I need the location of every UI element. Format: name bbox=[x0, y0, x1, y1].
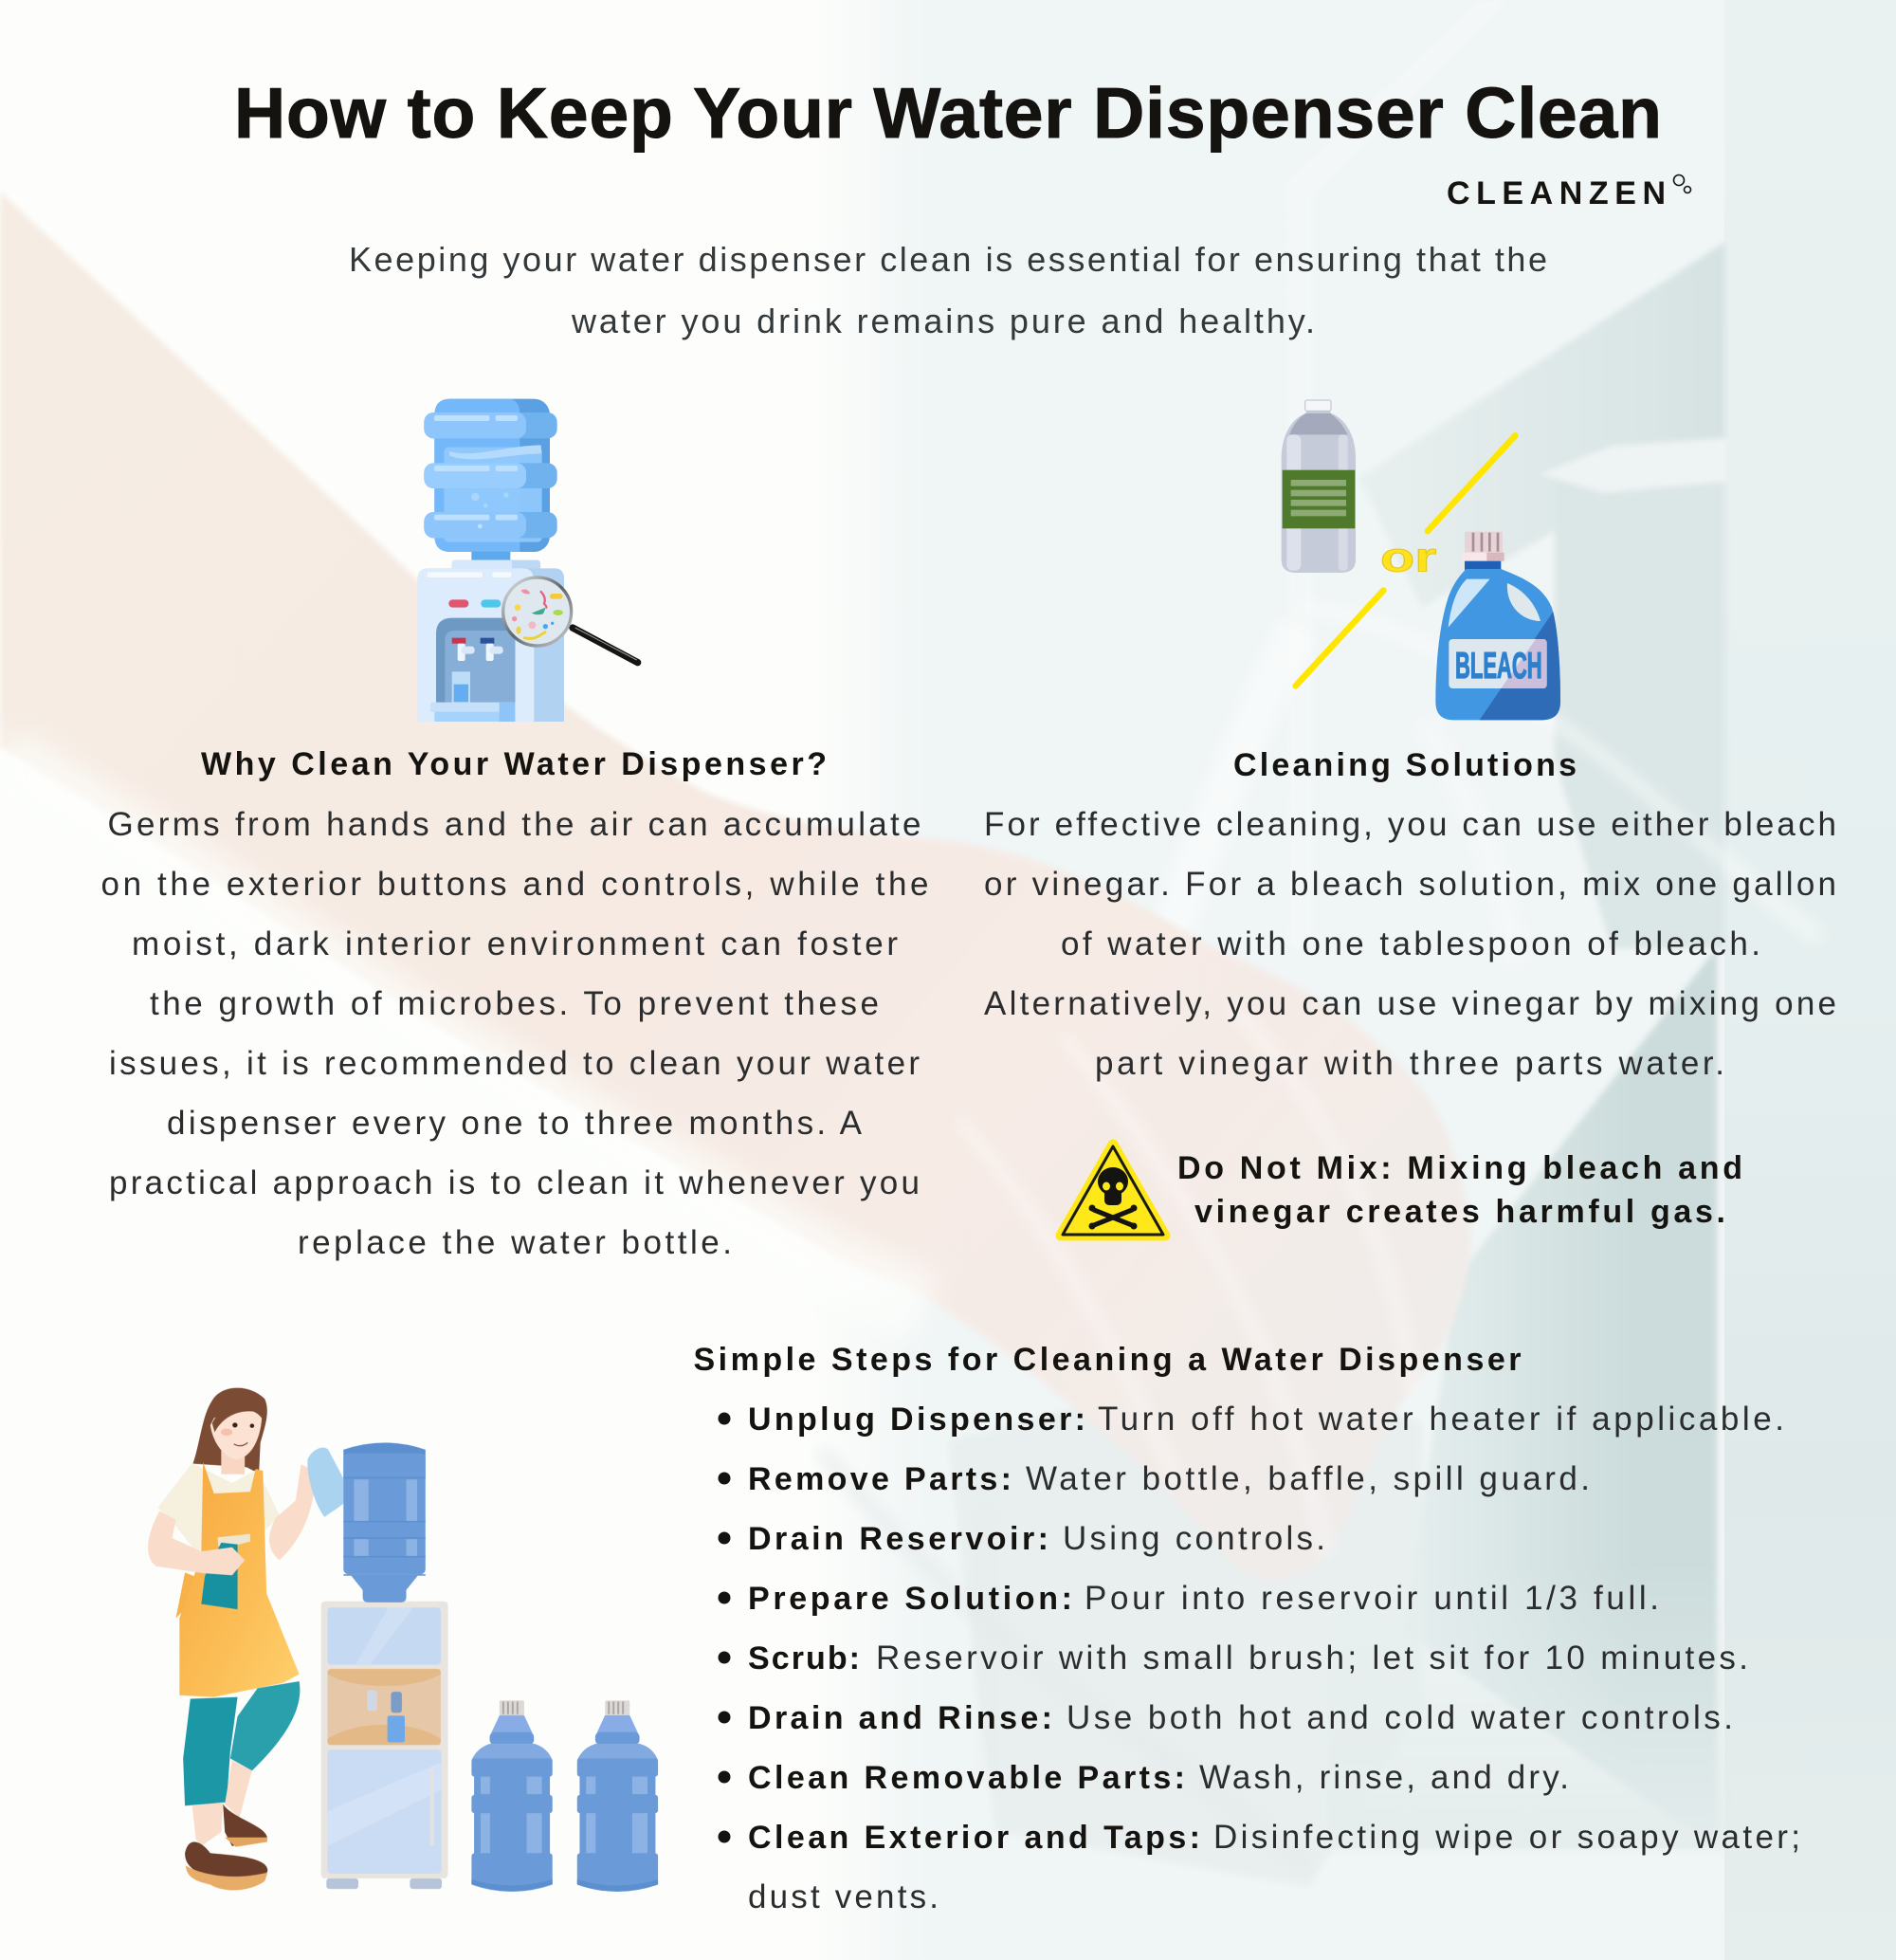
illustration: spare bottle 2 bbox=[577, 1700, 658, 1892]
step: prepare solution: Prepare Solution: bbox=[748, 1581, 1072, 1617]
text block: why clean: on the exterior buttons and controls, while the bbox=[100, 866, 929, 903]
step: unplug dispenser: Turn off hot water heater if applicable. bbox=[1098, 1401, 1784, 1438]
or divider bbox=[1296, 435, 1515, 686]
title: How to Keep Your Water Dispenser Clean bbox=[234, 73, 1662, 153]
step: scrub: Reservoir with small brush; let sit for 10 minutes. bbox=[876, 1639, 1748, 1676]
step: clean removable parts: Wash, rinse, and dry. bbox=[1199, 1759, 1569, 1796]
step: unplug dispenser: Unplug Dispenser: bbox=[748, 1401, 1085, 1438]
heading: cleaning solutions: Cleaning Solutions bbox=[1233, 747, 1577, 783]
text block: why clean: practical approach is to clean it whenever you bbox=[109, 1164, 920, 1201]
step: prepare solution bbox=[719, 1580, 1659, 1617]
text block: cleaning solutions: For effective cleaning, you can use either bleach bbox=[984, 806, 1836, 843]
icon: poison warning triangle bbox=[1061, 1145, 1165, 1236]
step: drain and rinse: Drain and Rinse: bbox=[748, 1700, 1052, 1736]
illustration: dispenser bbox=[321, 1602, 448, 1889]
text block: why clean: the growth of microbes. To prevent these bbox=[150, 985, 879, 1022]
callout: do not mix: vinegar creates harmful gas. bbox=[1194, 1194, 1725, 1230]
illustration: spare bottle 1 bbox=[471, 1700, 553, 1892]
step: clean removable parts: Clean Removable Parts: bbox=[748, 1760, 1185, 1796]
text block: cleaning solutions: of water with one tablespoon of bleach. bbox=[1061, 925, 1760, 962]
step: unplug dispenser bbox=[719, 1401, 1784, 1438]
icon: magnifier bbox=[503, 577, 638, 663]
step: scrub: Scrub: bbox=[748, 1640, 860, 1676]
step: clean exterior and taps: Disinfecting wipe or soapy water; bbox=[1213, 1819, 1800, 1856]
step: drain reservoir: Drain Reservoir: bbox=[748, 1521, 1048, 1557]
text block: why clean: Germs from hands and the air can accumulate bbox=[108, 806, 921, 843]
heading: simple steps: Simple Steps for Cleaning a Water Dispenser bbox=[694, 1342, 1521, 1378]
illustration: woman cleaning a water dispenser with bottles bbox=[148, 1388, 658, 1892]
icon: bleach jug: BLEACH bbox=[1455, 645, 1542, 687]
text block: why clean: replace the water bottle. bbox=[298, 1224, 732, 1261]
brand logo: CLEANZEN: CLEANZEN bbox=[1447, 175, 1666, 211]
icon: vinegar bottle bbox=[1282, 400, 1356, 573]
or divider: or bbox=[1380, 536, 1436, 581]
callout: do not mix bbox=[1177, 1150, 1742, 1230]
step: prepare solution: Pour into reservoir until 1/3 full. bbox=[1085, 1580, 1659, 1617]
text block: cleaning solutions: part vinegar with three parts water. bbox=[1095, 1045, 1724, 1082]
intro text bbox=[349, 240, 1547, 340]
step: remove parts: Water bottle, baffle, spill guard. bbox=[1026, 1460, 1590, 1497]
heading: why clean: Why Clean Your Water Dispenser? bbox=[201, 746, 827, 782]
step: clean exterior and taps: Clean Exterior and Taps: bbox=[748, 1820, 1200, 1856]
illustration: woman bbox=[148, 1388, 349, 1890]
text block: why clean: issues, it is recommended to clean your water bbox=[109, 1045, 920, 1082]
text block: why clean bbox=[100, 806, 929, 1261]
callout: do not mix: Do Not Mix: Mixing bleach and bbox=[1177, 1150, 1742, 1186]
text block: why clean: moist, dark interior environment can foster bbox=[132, 925, 898, 962]
intro text: Keeping your water dispenser clean is essential for ensuring that the bbox=[349, 240, 1547, 279]
step: clean exterior and taps bbox=[719, 1819, 1800, 1915]
step: drain and rinse: Use both hot and cold water controls. bbox=[1066, 1699, 1733, 1736]
step: remove parts bbox=[719, 1460, 1590, 1497]
icon: water dispenser with magnifier bbox=[418, 399, 638, 722]
icon: bleach jug bbox=[1435, 532, 1560, 720]
intro text: water you drink remains pure and healthy. bbox=[571, 302, 1315, 340]
step: drain and rinse bbox=[719, 1699, 1733, 1736]
step: remove parts: Remove Parts: bbox=[748, 1461, 1012, 1497]
text block: why clean: dispenser every one to three months. A bbox=[167, 1105, 863, 1142]
illustration: large bottle on dispenser bbox=[343, 1442, 426, 1603]
text block: cleaning solutions: or vinegar. For a bleach solution, mix one gallon bbox=[984, 866, 1836, 903]
step: drain reservoir bbox=[719, 1520, 1325, 1557]
arm and hand bbox=[0, 192, 1470, 1580]
step: clean removable parts bbox=[719, 1759, 1569, 1796]
list: cleaning steps bbox=[719, 1401, 1800, 1915]
text block: cleaning solutions bbox=[984, 806, 1836, 1082]
icon: vinegar bottle, or, bleach bottle bbox=[1282, 400, 1560, 720]
step: drain reservoir: Using controls. bbox=[1063, 1520, 1325, 1557]
step: clean exterior and taps: dust vents. bbox=[748, 1878, 939, 1915]
text block: cleaning solutions: Alternatively, you can use vinegar by mixing one bbox=[984, 985, 1836, 1022]
